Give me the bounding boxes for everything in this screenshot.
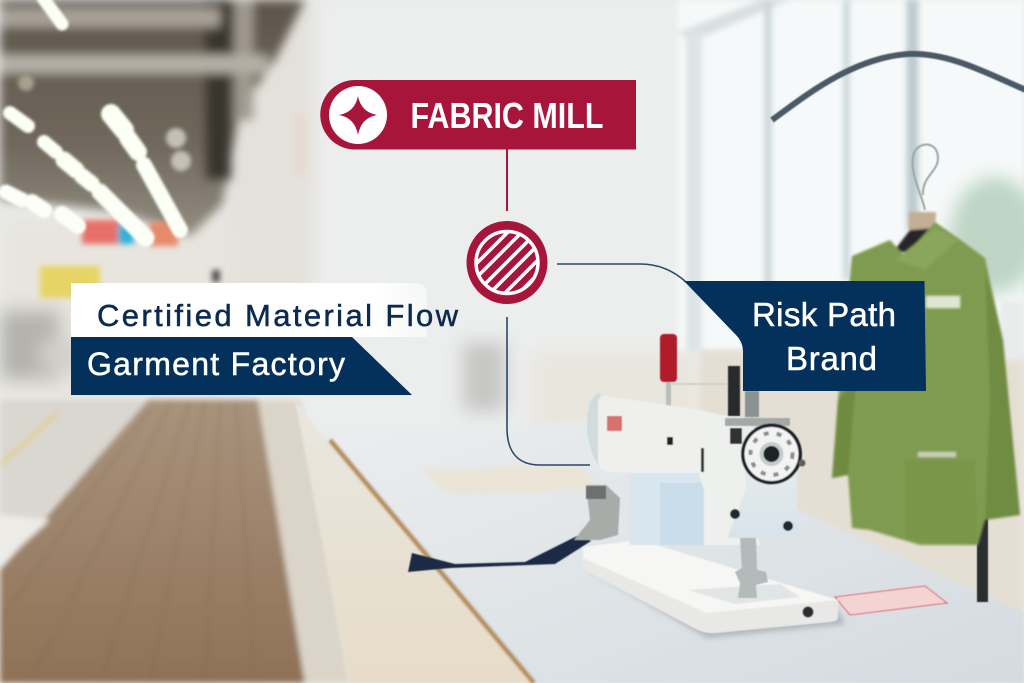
connector: hub to factory xyxy=(507,317,590,465)
pattern card xyxy=(835,586,947,615)
presser foot xyxy=(735,538,768,598)
icon: fabric hub xyxy=(466,221,548,304)
table xyxy=(295,400,1024,683)
label: garment factory: Garment Factory xyxy=(87,346,345,382)
fabric mill label xyxy=(320,80,636,150)
label: risk path brand xyxy=(684,281,926,391)
jacket on stand xyxy=(772,54,1024,602)
dial xyxy=(741,424,802,484)
label: certified material flow: Certified Material Flow xyxy=(97,298,459,333)
base plate xyxy=(583,540,838,633)
spool xyxy=(660,334,677,382)
sewing machine xyxy=(408,334,947,638)
thread guide xyxy=(728,366,740,416)
connector: hub to brand xyxy=(557,264,686,282)
stand pole xyxy=(977,515,988,602)
hanger hook xyxy=(913,144,938,210)
window xyxy=(678,0,1024,350)
base plate shadow xyxy=(590,560,845,638)
label: certified material flow xyxy=(71,283,459,337)
heading: FABRIC MILL xyxy=(410,95,604,136)
label: risk path brand: Brand xyxy=(786,340,877,377)
ceiling lights xyxy=(6,0,180,238)
connector: mill to hub xyxy=(506,149,508,211)
floor xyxy=(0,400,350,683)
arm and body xyxy=(587,392,600,468)
label: garment factory xyxy=(71,337,412,395)
curved rail xyxy=(772,54,1024,120)
label: risk path brand: Risk Path xyxy=(752,296,896,333)
ribbon xyxy=(408,533,591,572)
icon: star badge xyxy=(329,86,387,144)
